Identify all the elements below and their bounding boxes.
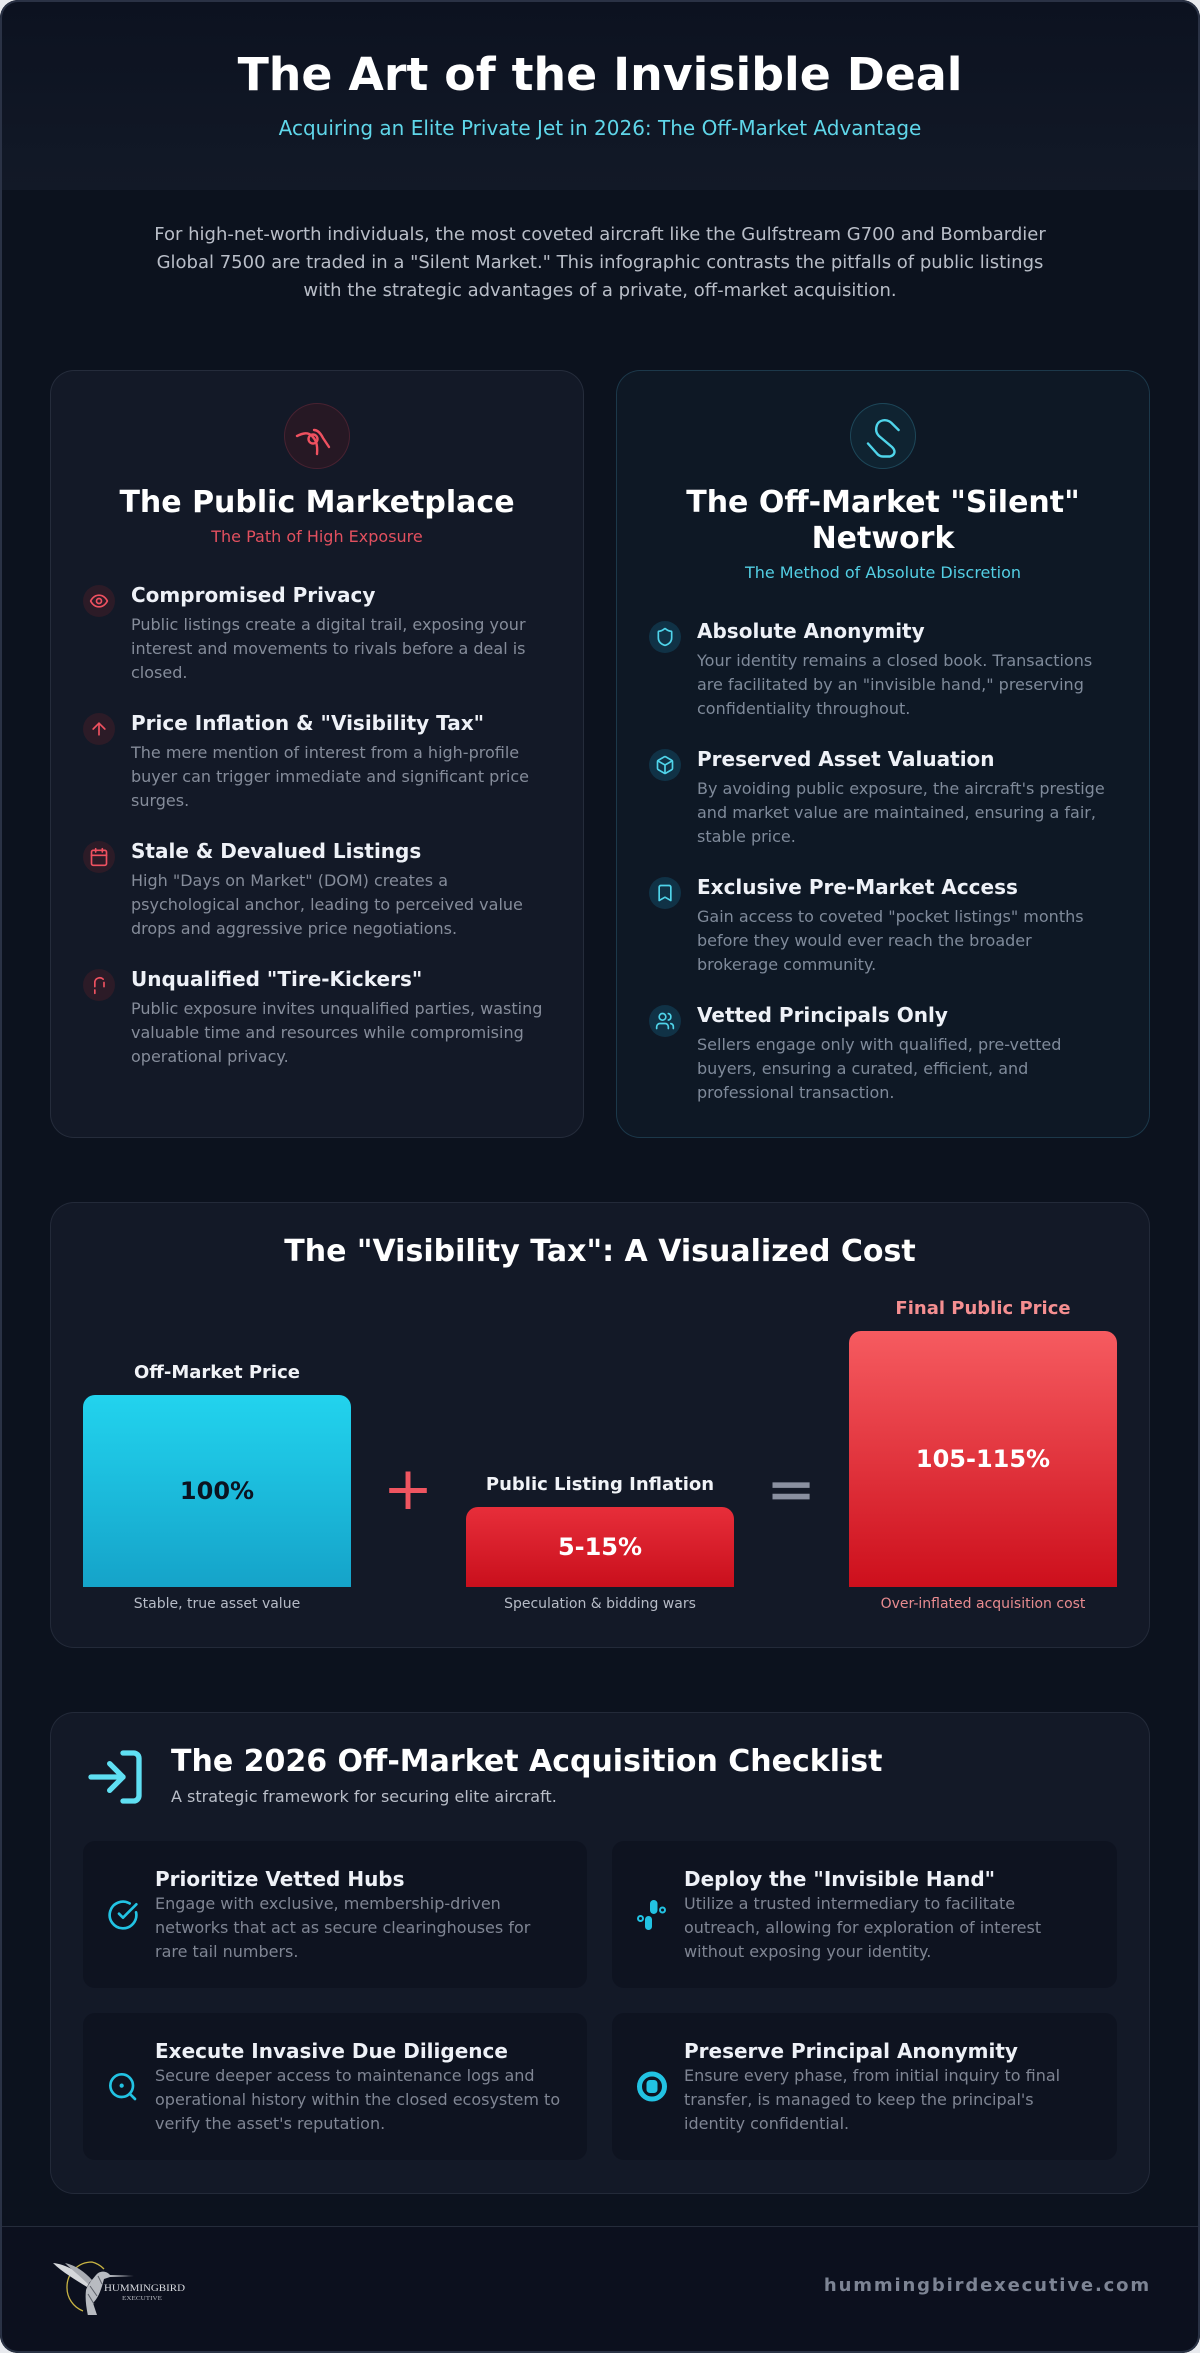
item text: Sellers engage only with qualified, pre-vetted [697, 1035, 1061, 1054]
item text: By avoiding public exposure, the aircraft's prestige [697, 779, 1105, 798]
icon: chain link [850, 403, 916, 469]
panel: visibility tax chart [50, 1202, 1150, 1648]
equals operator: = [767, 1455, 815, 1523]
card text [155, 1894, 530, 1961]
item title: Price Inflation & "Visibility Tax" [131, 711, 484, 735]
intro paragraph: with the strategic advantages of a private, off-market acquisition. [303, 280, 897, 301]
item text: buyer can trigger immediate and significant price [131, 767, 529, 786]
card text [684, 1894, 1041, 1961]
bar: inflation 5-15%: 5-15% [558, 1533, 642, 1561]
heading: The Public Marketplace [119, 485, 515, 520]
card text: Engage with exclusive, membership-driven [155, 1894, 501, 1913]
heading: Network [812, 521, 954, 556]
caption: inflation: Speculation & bidding wars [504, 1596, 696, 1612]
plus operator: + [383, 1454, 433, 1524]
item title: Vetted Principals Only [697, 1003, 948, 1027]
item title: Compromised Privacy [131, 583, 375, 607]
card text: identity confidential. [684, 2114, 849, 2133]
icon: calendar [83, 841, 115, 873]
item text: are facilitated by an "invisible hand," preserving [697, 675, 1084, 694]
intro paragraph [154, 224, 1046, 301]
label: off-market price: Off-Market Price [134, 1362, 300, 1383]
card title: Preserve Principal Anonymity [684, 2039, 1018, 2063]
card text: Secure deeper access to maintenance logs and [155, 2066, 535, 2085]
card title: Prioritize Vetted Hubs [155, 1867, 405, 1891]
icon: broken arch [83, 969, 115, 1001]
card text: rare tail numbers. [155, 1942, 298, 1961]
item title: Unqualified "Tire-Kickers" [131, 967, 422, 991]
caption: final: Over-inflated acquisition cost [881, 1596, 1085, 1612]
header band [0, 0, 1200, 190]
checklist subheading: A strategic framework for securing elite aircraft. [171, 1787, 557, 1806]
icon: arrow up [83, 713, 115, 745]
heading [686, 485, 1080, 556]
card: vetted hubs [83, 1841, 587, 1988]
icon: box [649, 749, 681, 781]
item text: buyers, ensuring a curated, efficient, and [697, 1059, 1028, 1078]
item: preserved valuation [649, 747, 1105, 846]
icon: tangled path [284, 403, 350, 469]
subtitle: Acquiring an Elite Private Jet in 2026: The Off-Market Advantage [279, 116, 921, 140]
intro paragraph: Global 7500 are traded in a "Silent Market." This infographic contrasts the pitfalls of public listings [157, 252, 1043, 273]
item text: Public exposure invites unqualified parties, wasting [131, 999, 542, 1018]
title: The Art of the Invisible Deal [238, 47, 962, 101]
card text [684, 2066, 1060, 2133]
item text: psychological anchor, leading to perceived value [131, 895, 523, 914]
logo: hummingbird executive: EXECUTIVE [122, 2295, 162, 2302]
panel: acquisition checklist [50, 1712, 1150, 2194]
item: vetted principals [649, 1003, 1061, 1102]
card: principal anonymity [612, 2013, 1117, 2160]
item text: brokerage community. [697, 955, 876, 974]
card: due diligence [83, 2013, 587, 2160]
icon: ring [637, 2072, 667, 2102]
item text [697, 779, 1105, 846]
icon: scattered nodes [637, 1900, 666, 1930]
card title: Deploy the "Invisible Hand" [684, 1867, 995, 1891]
checklist heading: The 2026 Off-Market Acquisition Checklist [171, 1744, 882, 1779]
card text: operational history within the closed ecosystem to [155, 2090, 560, 2109]
logo: hummingbird executive [53, 2261, 185, 2315]
item text: before they would ever reach the broader [697, 931, 1032, 950]
website url: hummingbirdexecutive.com [824, 2275, 1151, 2296]
chart heading: The "Visibility Tax": A Visualized Cost [284, 1234, 916, 1269]
item text: confidentiality throughout. [697, 699, 910, 718]
item: stale listings [83, 839, 523, 938]
icon: shield [649, 621, 681, 653]
card text: outreach, allowing for exploration of interest [684, 1918, 1041, 1937]
item text: surges. [131, 791, 189, 810]
label: final public price: Final Public Price [895, 1298, 1071, 1319]
icon: users [649, 1005, 681, 1037]
item text: valuable time and resources while compromising [131, 1023, 524, 1042]
icon: check circle [108, 1900, 138, 1930]
card title: Execute Invasive Due Diligence [155, 2039, 508, 2063]
card text: Ensure every phase, from initial inquiry to final [684, 2066, 1060, 2085]
item text [131, 615, 526, 682]
panel: the public marketplace [50, 370, 584, 1138]
item text: Gain access to coveted "pocket listings" months [697, 907, 1084, 926]
item: pre-market access [649, 875, 1084, 974]
card: invisible hand [612, 1841, 1117, 1988]
item text: closed. [131, 663, 187, 682]
item text: stable price. [697, 827, 796, 846]
heading: The Off-Market "Silent" [686, 485, 1080, 520]
item text: Public listings create a digital trail, exposing your [131, 615, 526, 634]
item title: Preserved Asset Valuation [697, 747, 995, 771]
logo: hummingbird executive: HUMMINGBIRD [104, 2284, 185, 2294]
item text: interest and movements to rivals before a deal is [131, 639, 526, 658]
item text [130, 743, 529, 810]
item text [697, 1035, 1061, 1102]
bar: final 105-115% [849, 1331, 1117, 1587]
subheading: The Path of High Exposure [211, 527, 423, 546]
bar: inflation 5-15% [466, 1507, 734, 1587]
item text [697, 651, 1092, 718]
panel: the off-market network [616, 370, 1150, 1138]
card text: networks that act as secure clearinghouses for [155, 1918, 530, 1937]
bar: off-market 100% [83, 1395, 351, 1587]
item text [131, 871, 523, 938]
subheading: The Method of Absolute Discretion [745, 563, 1021, 582]
intro paragraph: For high-net-worth individuals, the most coveted aircraft like the Gulfstream G700 and Bombardier [154, 224, 1046, 245]
icon: log-in arrow [88, 1750, 142, 1804]
label: public listing inflation: Public Listing Inflation [486, 1474, 714, 1495]
footer band [0, 2226, 1200, 2353]
caption: off-market: Stable, true asset value [134, 1596, 300, 1612]
item: tire-kickers [83, 967, 542, 1066]
icon: eye [83, 585, 115, 617]
item text: High "Days on Market" (DOM) creates a [131, 871, 448, 890]
bar: off-market 100%: 100% [180, 1477, 254, 1505]
icon: bookmark [649, 877, 681, 909]
card text [155, 2066, 560, 2133]
item text: Your identity remains a closed book. Transactions [697, 651, 1092, 670]
item title: Absolute Anonymity [697, 619, 925, 643]
item text: operational privacy. [131, 1047, 289, 1066]
bar: final 105-115%: 105-115% [916, 1445, 1050, 1473]
card text: transfer, is managed to keep the principal's [684, 2090, 1034, 2109]
icon: search [109, 2073, 136, 2100]
item: price inflation [83, 711, 529, 810]
card text: without exposing your identity. [684, 1942, 931, 1961]
item text: professional transaction. [697, 1083, 894, 1102]
item title: Stale & Devalued Listings [131, 839, 421, 863]
item text: The mere mention of interest from a high-profile [131, 743, 519, 762]
item: absolute anonymity [649, 619, 1092, 718]
item title: Exclusive Pre-Market Access [697, 875, 1018, 899]
item text: and market value are maintained, ensuring a fair, [697, 803, 1096, 822]
item text: drops and aggressive price negotiations. [131, 919, 457, 938]
item: compromised privacy [83, 583, 526, 682]
card text: Utilize a trusted intermediary to facilitate [684, 1894, 1015, 1913]
item text [131, 999, 542, 1066]
item text [697, 907, 1084, 974]
card text: verify the asset's reputation. [155, 2114, 385, 2133]
